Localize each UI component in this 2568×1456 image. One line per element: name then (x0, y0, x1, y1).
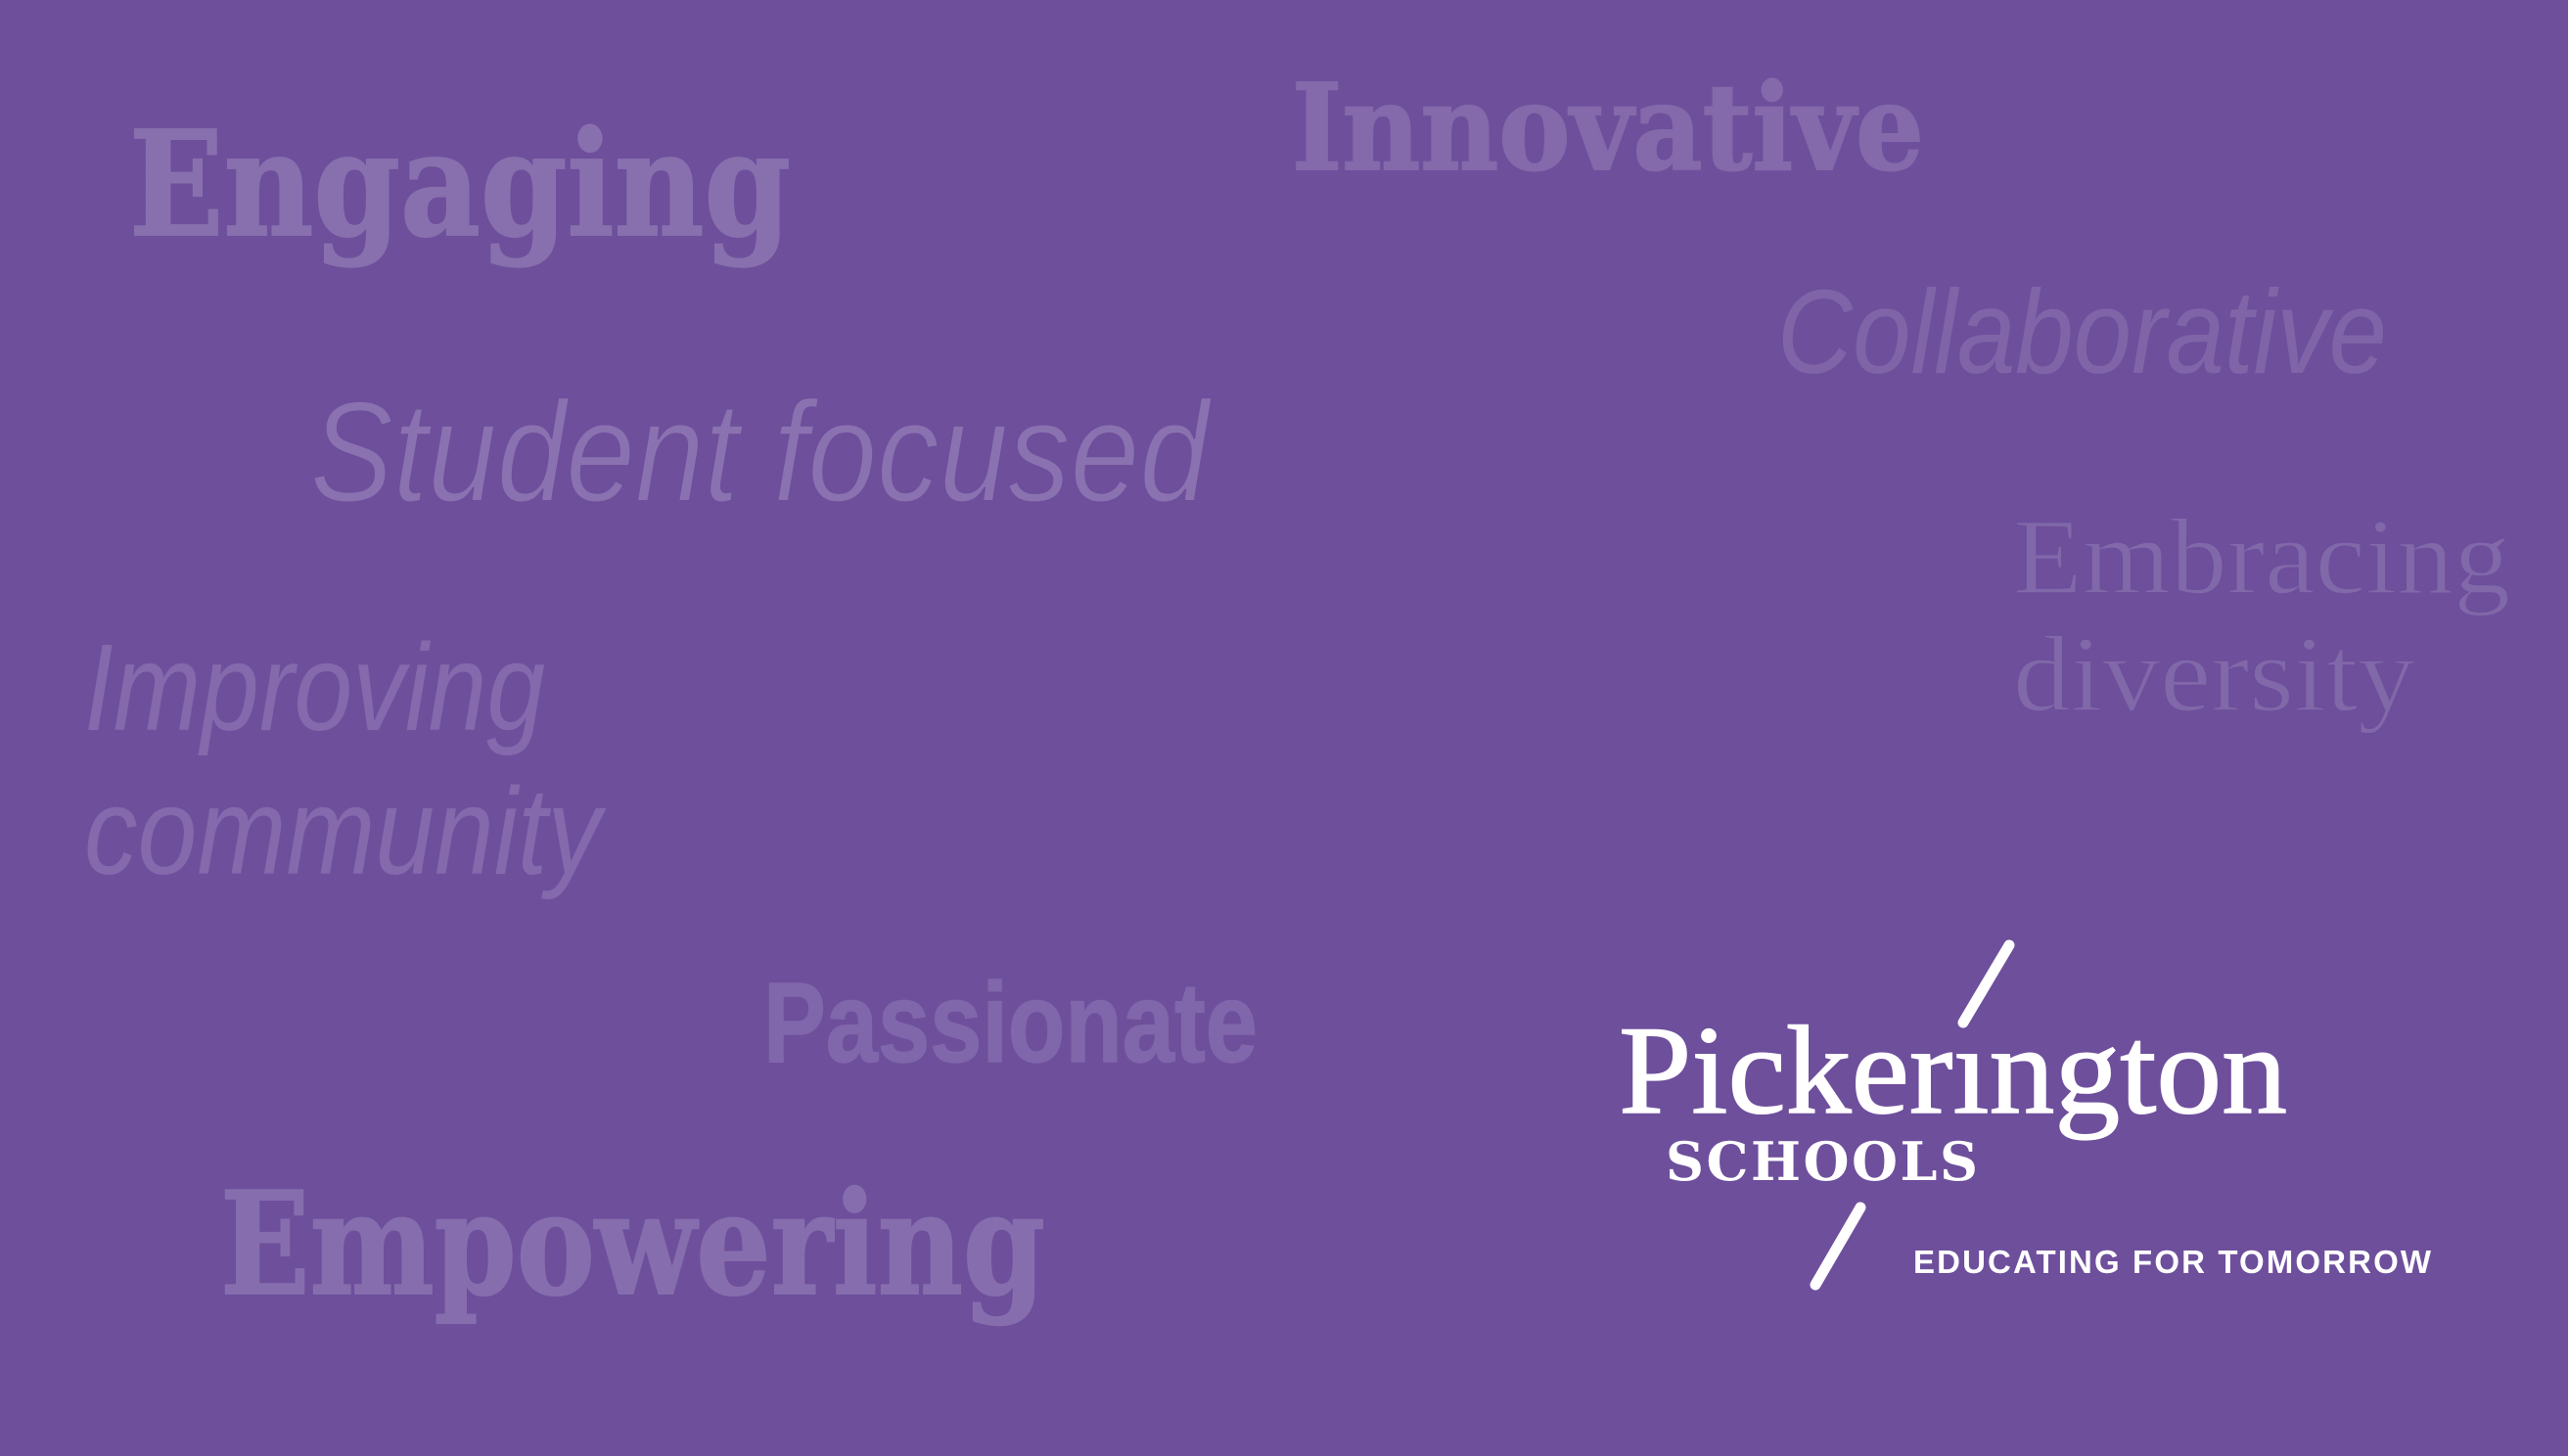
tagline: EDUCATING FOR TOMORROW (1913, 1244, 2432, 1280)
word: Collaborative: Collaborative (1777, 265, 2387, 398)
logo wordmark: Pickerıngton (1619, 1000, 2287, 1140)
logo subtitle: SCHOOLS (1666, 1130, 1978, 1193)
word: Passionate: Passionate (763, 959, 1258, 1086)
word: Student focused: Student focused (310, 372, 1213, 531)
logo slash: top (1963, 945, 2009, 1023)
word group: Improving community (84, 618, 607, 900)
logo slash: bottom (1815, 1207, 1860, 1285)
word group: Embracing diversity: Embracing (2013, 497, 2510, 616)
word group: Embracing diversity: diversity (2013, 614, 2415, 734)
word group: Embracing diversity (2013, 497, 2510, 734)
word: Engaging: Engaging (129, 99, 791, 269)
word: Empowering: Empowering (220, 1161, 1045, 1328)
logo: Pickerington Schools (1619, 945, 2432, 1285)
word group: Improving community: Improving (84, 618, 545, 756)
word group: Improving community: community (84, 762, 607, 900)
word: Innovative: Innovative (1292, 57, 1924, 198)
